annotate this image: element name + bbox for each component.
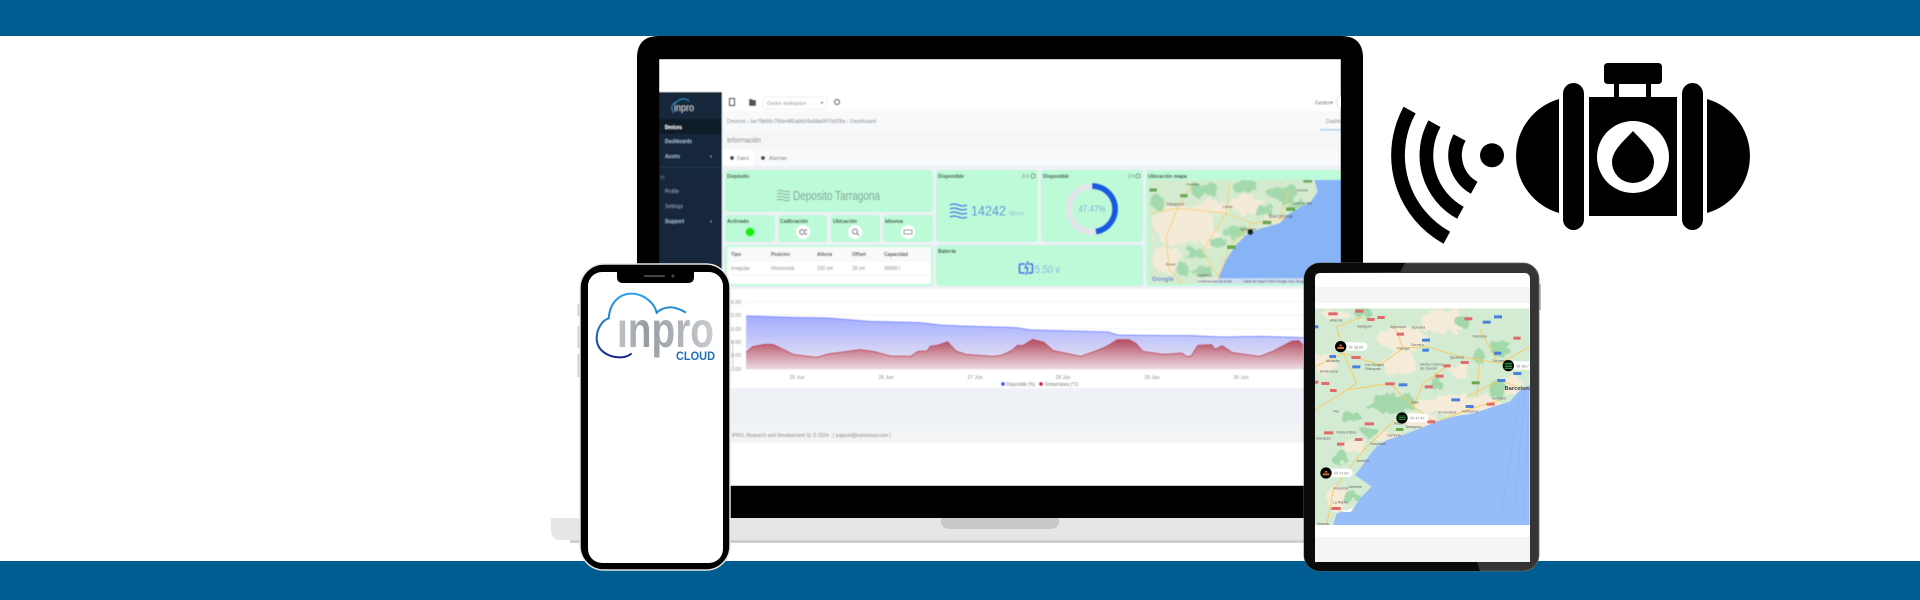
map: Catalonia region: Lloret de Mar (1293, 202, 1313, 206)
y axis labels: 0.00 (731, 367, 741, 373)
tabs row: Datos (737, 156, 749, 162)
map: fleet of tanks: Igualada (1450, 356, 1465, 360)
x axis dates: 29 Jun (1144, 375, 1160, 381)
area chart: disponible and temperatura (746, 316, 1303, 369)
tablet (1304, 263, 1541, 571)
map: fleet of tanks: Amposta (1333, 486, 1349, 490)
top toolbar: Gestor workspace (767, 101, 806, 107)
card: device table: 250 cm (817, 266, 833, 272)
icon: fuel drop (1612, 131, 1654, 183)
chart legend: Disponible (%) (1006, 382, 1035, 388)
top blue band (0, 0, 1920, 36)
icon: tank straps (1563, 83, 1703, 230)
y axis labels: 80.00 (728, 313, 741, 319)
x axis dates: 28 Jun (1055, 375, 1071, 381)
logo cloud outline (597, 294, 686, 357)
card: ubicación (831, 215, 880, 242)
sidebar menu: Support (665, 219, 684, 225)
map: fleet of tanks: Valls (1411, 401, 1419, 405)
y axis labels (730, 300, 742, 372)
tabs row: Alarmas (769, 156, 787, 162)
card: batería: Batería (938, 249, 957, 255)
map: fleet of tanks (1313, 307, 1535, 526)
map: fleet of tanks: Hospitalet (1370, 442, 1386, 446)
card: ubicación mapa: Ubicación mapa (1148, 174, 1188, 180)
marker: tank 18.00 (1335, 341, 1367, 352)
sidebar (659, 91, 723, 270)
laptop base (551, 518, 1449, 543)
section heading: información: Información (727, 138, 761, 144)
map: fleet of tanks: Alcarràs (1326, 359, 1340, 363)
map: fleet of tanks: El Vendrell (1438, 411, 1456, 415)
map: fleet of tanks: Sant Boi (1492, 396, 1506, 400)
card: device table: Capacidad (884, 252, 908, 258)
icon: signal dot (1480, 143, 1504, 167)
icon: tank cap (1604, 63, 1662, 97)
laptop screen (659, 59, 1348, 486)
card: depósito: Deposito Tarragona (793, 188, 881, 203)
marker: tank 47.47: 47.47 (1415, 417, 1424, 421)
marker: tank 66.7: ⛁ (1517, 363, 1521, 368)
card: batería: 5.50 v (1035, 264, 1060, 276)
section heading: información (722, 130, 1341, 149)
logo cloud label: CLOUD (676, 351, 715, 363)
card: device table: Horizontal (771, 266, 794, 272)
icon: tank label circle (1597, 121, 1669, 193)
footer bar (731, 425, 1304, 442)
map: Catalonia region: Barcelona (1269, 214, 1293, 220)
map: fleet of tanks: de Queralt (1420, 366, 1437, 370)
map: fleet of tanks: Les Borges (1365, 363, 1384, 367)
logo wordmark dot mask (615, 306, 635, 320)
card: disponible litros: Disponible (938, 174, 964, 180)
icon: tank right end (1707, 99, 1750, 213)
map: fleet of tanks: Flix (1333, 410, 1339, 414)
phone (578, 264, 730, 570)
marker: tank 47.47: ⛁ (1410, 416, 1414, 421)
map: fleet of tanks: Deltebre (1348, 485, 1362, 489)
x axis dates: 25 Jun (789, 375, 805, 381)
icon: battery (1020, 261, 1032, 275)
card: disponible gauge: Disponible (1043, 174, 1069, 180)
breadcrumb bar: Devices › be79b66c765e485abb04a68a0970d28a › Dashboard (727, 119, 876, 125)
marker: tank 66.7 (1502, 360, 1530, 372)
marker: tank 17.83: ⛁ (1334, 471, 1338, 476)
map: Catalonia region: Lleida (1223, 205, 1233, 209)
sidebar menu: › (710, 219, 712, 225)
sidebar menu: Profile (665, 189, 679, 195)
phone screen (588, 272, 723, 563)
map: fleet of tanks: Agramunt (1390, 325, 1406, 329)
map: Catalonia region: Datos del mapa ©2024 Google, Inst. Geogr. Nacional (1243, 279, 1318, 283)
tablet frame (1304, 263, 1539, 571)
laptop (551, 36, 1449, 543)
icon: signal waves (1398, 110, 1474, 238)
dashboard background (722, 166, 1341, 425)
map: fleet of tanks: Tarragona (1405, 425, 1422, 429)
map: fleet of tanks: La Ràpita (1333, 500, 1349, 504)
card: ubicación: Ubicación (833, 219, 858, 225)
map: Catalonia region: Castellón (1197, 274, 1212, 278)
top toolbar: Gestor▾ (1315, 100, 1333, 106)
card: device table: Altura (817, 252, 832, 258)
card: disponible litros: litros (1009, 210, 1025, 218)
icon: tank left end (1516, 99, 1559, 213)
map: fleet of tanks: Solsona (1412, 326, 1426, 330)
top toolbar (730, 96, 1348, 109)
map: Catalonia region (1149, 180, 1341, 284)
map: fleet of tanks: Tàrrega (1397, 346, 1410, 350)
sidebar menu: Devices (665, 125, 682, 131)
sidebar logo (672, 99, 694, 114)
sidebar menu: Settings (665, 204, 683, 210)
breadcrumb bar (726, 118, 1341, 131)
tabs row (729, 155, 788, 161)
map: fleet of tanks: Alfarràs (1330, 319, 1343, 323)
map: Catalonia region: Combinaciones de teclas (1197, 279, 1232, 283)
map: fleet of tanks: Blanques (1365, 367, 1381, 371)
gauge ring (1069, 186, 1115, 232)
x axis dates (789, 374, 1249, 380)
card: device table: Posición (771, 252, 790, 258)
map: fleet of tanks: Vilafranca (1462, 409, 1479, 413)
marker: tank 17.83: 17.83 (1339, 472, 1348, 476)
marker: tank 18.00: ⛁ (1349, 344, 1353, 349)
breadcrumb bar: Dashb (1326, 119, 1341, 125)
card: activado: Activado (727, 219, 750, 225)
sidebar logo: inpro (674, 103, 694, 114)
map: fleet of tanks: Cambrils (1387, 434, 1401, 438)
chart legend (1001, 382, 1079, 388)
card: device table: 18 cm (852, 266, 865, 272)
card: disponible litros (936, 170, 1038, 242)
card: idioma (883, 215, 933, 242)
chart legend: Temperatura (°C) (1044, 382, 1079, 388)
map: fleet of tanks: Móra d'Ebre (1337, 430, 1356, 434)
logo: inpro cloud (597, 294, 715, 363)
map: fleet of tanks: Ametlla (1357, 459, 1370, 463)
tablet side button (1539, 284, 1541, 310)
chart panel (722, 289, 1341, 388)
icon: connected fuel tank (1398, 63, 1750, 238)
card: disponible litros: 14242 (971, 202, 1006, 218)
phone side buttons (578, 304, 580, 377)
x axis dates: 30 Jun (1233, 375, 1249, 381)
map: fleet of tanks: Gandesa (1316, 436, 1331, 440)
marker: tank 47.47 (1396, 412, 1429, 424)
icon: tank lines (777, 190, 790, 201)
card: disponible litros: 3 h (1022, 174, 1029, 180)
card: device table: Offset (852, 252, 866, 258)
card: ubicación mapa (1146, 170, 1341, 286)
map: fleet of tanks: Terrassa (1493, 359, 1508, 363)
map: fleet of tanks: Cervera (1411, 343, 1425, 347)
footer bar: IPRO, Research and Development SL © 2024 - ( support@inprocloud.com ) (732, 432, 891, 439)
card: disponible gauge: 47.47% (1078, 204, 1106, 214)
y axis labels: 20.00 (728, 353, 741, 359)
map: Catalonia region: Zaragoza (1166, 201, 1185, 206)
card: device table: Tipo (731, 252, 741, 258)
x axis dates: 26 Jun (878, 375, 894, 381)
card: disponible gauge (1041, 170, 1143, 242)
sidebar menu: › (710, 154, 712, 160)
marker: tank 66.7: 66.7 (1522, 364, 1529, 368)
map: fleet of tanks: Balaguer (1357, 324, 1373, 328)
map: Catalonia region: Huesca (1187, 182, 1200, 186)
marker: tank 18.00: 18.00 (1354, 345, 1363, 349)
map: fleet of tanks: Santa Coloma (1420, 363, 1444, 367)
card: device table: 30000 l (884, 266, 900, 272)
phone notch (617, 272, 694, 283)
card: depósito (725, 170, 933, 212)
y axis labels: 40.00 (728, 340, 741, 346)
card: device table: Irregular (731, 266, 750, 272)
y axis labels: 60.00 (728, 327, 741, 333)
map: Catalonia region: Girona (1297, 189, 1309, 193)
map: Catalonia region: Tarragona (1240, 227, 1257, 231)
x axis dates: 27 Jun (967, 375, 983, 381)
sidebar menu: et (660, 175, 665, 181)
phone body (580, 264, 730, 570)
card: calibración (778, 215, 827, 242)
map: fleet of tanks: Mollerussa (1320, 370, 1339, 374)
map: Catalonia region: Google (1152, 276, 1174, 283)
map: fleet of tanks: Reus (1394, 422, 1403, 426)
laptop bezel (637, 36, 1363, 518)
y axis labels: 100.00 (726, 300, 741, 306)
map: fleet of tanks: Manresa (1473, 334, 1488, 338)
card: batería (936, 245, 1143, 286)
sidebar menu (660, 125, 712, 225)
logo wordmark: inpro (617, 302, 714, 358)
bottom blue band (0, 561, 1920, 600)
card: idioma: Idioma (885, 219, 904, 225)
tablet screen (1313, 273, 1535, 562)
icon: tank body (1589, 97, 1677, 216)
icon: water waves (950, 204, 967, 218)
marker: tank 17.83 (1320, 467, 1353, 479)
card: device table (725, 245, 933, 286)
sidebar menu: Assets (665, 154, 680, 160)
card: disponible gauge: 3 h (1128, 174, 1135, 180)
map: fleet of tanks: Vinaròs (1317, 522, 1329, 526)
map: fleet of tanks: Barcelona (1505, 386, 1533, 392)
card: activado (725, 215, 775, 242)
sidebar menu: Dashboards (665, 139, 692, 145)
map: Catalonia region: Teruel (1165, 262, 1175, 266)
card: depósito: Depósito (727, 174, 750, 180)
card: calibración: Calibración (780, 219, 809, 225)
